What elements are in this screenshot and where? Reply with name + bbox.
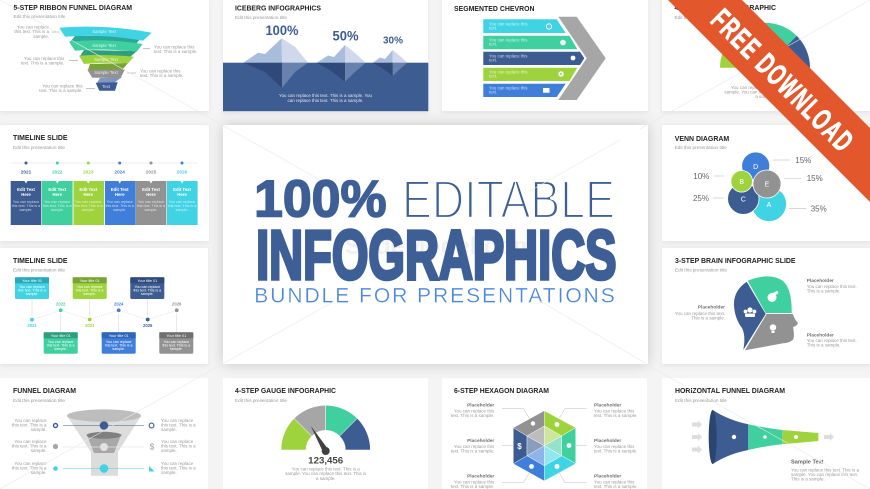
timeline cards: sample. — [83, 292, 96, 296]
funnel captions: this text. This is a — [14, 29, 49, 34]
chevron bars: text. — [489, 42, 497, 46]
subtitle: Edit this presentation title — [675, 268, 728, 272]
venn circles: B — [739, 179, 744, 186]
subtitle: Edit this presentation title — [13, 145, 66, 150]
iceberg percentages: 30% — [383, 36, 403, 46]
funnel captions: this text. This is a — [161, 466, 196, 470]
timeline boxes: this text. This is a — [12, 204, 41, 208]
chevron graphic — [558, 17, 606, 100]
iceberg caption: You can replace this text. This is a sample. You — [279, 93, 373, 98]
funnel captions: You can replace this — [140, 68, 181, 74]
iceberg percentages: 50% — [332, 28, 358, 44]
brain captions: You can replace this text. — [807, 284, 857, 289]
funnel captions: sample. — [31, 470, 46, 475]
heading: timeline 2: TIMELINE SLIDE — [13, 256, 68, 265]
gauge caption: a sample. — [316, 476, 335, 481]
chart caption: a sample. — [755, 94, 775, 99]
gauge chart — [281, 405, 370, 450]
timeline boxes: Edit Text — [173, 187, 191, 192]
funnel chart — [63, 409, 144, 476]
timeline boxes: this text. This is a — [137, 204, 166, 208]
zig-zag timeline: 2021 — [27, 323, 37, 328]
gauge caption — [285, 466, 367, 481]
funnel captions — [14, 24, 197, 93]
timeline boxes: sample. — [51, 208, 64, 212]
hexagon captions: text. This is a sample. — [594, 448, 637, 454]
chart caption: You can replace this text. This is a — [731, 85, 800, 90]
venn percentages: 15% — [807, 174, 823, 183]
iceberg percentages — [266, 23, 403, 46]
timeline cards: this text. This is a — [105, 344, 133, 348]
timeline boxes: Here — [53, 192, 63, 197]
funnel captions: You can replace — [161, 439, 194, 444]
sample text block: This is a sample. — [791, 476, 825, 482]
funnel captions: this text. This is a — [161, 422, 196, 428]
gauge caption: You can replace this text. This is a — [292, 466, 360, 472]
funnel captions: text. This is a sample. — [154, 49, 197, 54]
zig-zag timeline: 2025 — [143, 323, 153, 328]
subtitle: Edit this presentation title — [674, 15, 727, 20]
chevron bars: text. — [489, 58, 497, 62]
heading: venn: VENN DIAGRAM — [675, 134, 729, 143]
panel: hexagon diagram — [442, 378, 647, 489]
funnel captions: You can replace — [14, 418, 47, 423]
hexagon connectors — [502, 408, 587, 483]
timeline boxes: this text. This is a — [105, 204, 135, 208]
timeline cards: Your title 01 — [137, 279, 157, 283]
flow arrows — [692, 420, 834, 454]
heading: hexagon: 6-STEP HEXAGON DIAGRAM — [454, 386, 549, 395]
panel: ribbon funnel — [0, 0, 209, 111]
hexagon chart: $ — [517, 442, 522, 451]
ribbon funnel chart: Sample Text — [92, 43, 117, 48]
funnel captions: You can replace this — [24, 56, 65, 61]
brain captions: Placeholder — [807, 278, 834, 284]
panel: horizontal funnel diagram — [662, 378, 870, 489]
brain captions: You can replace this text. — [807, 338, 857, 343]
timeline cards: sample. — [112, 347, 125, 351]
hexagon captions: You can replace this — [594, 444, 635, 449]
timeline boxes: Here — [146, 192, 156, 197]
timeline boxes: this text. This is a — [168, 204, 197, 208]
chart caption: sample. You can replace this text. This is — [724, 90, 806, 94]
hexagon captions: text. This is a sample. — [451, 484, 494, 489]
iceberg caption: can replace this text. This is a sample. — [288, 98, 364, 103]
hexagon captions: text. This is a sample. — [451, 413, 494, 418]
head chart — [734, 276, 798, 350]
subtitle: Edit this presentation title — [235, 15, 288, 20]
venn percentages: 35% — [811, 204, 827, 214]
funnel captions: sample. — [31, 427, 46, 432]
venn circles: A — [767, 202, 772, 209]
heading: funnel: FUNNEL DIAGRAM — [13, 386, 76, 395]
sample text block — [791, 460, 860, 482]
subtitle: Edit this presentation title — [675, 398, 728, 403]
funnel captions: You can replace — [161, 418, 194, 423]
hexagon captions: You can replace this — [454, 444, 495, 449]
timeline cards: You can replace — [19, 285, 45, 289]
iceberg chart — [243, 38, 407, 88]
semi-circle chart — [720, 23, 810, 68]
timeline boxes: Edit Text — [111, 187, 129, 192]
watermark: SlideModel.com — [345, 233, 535, 260]
chevron bars: You can replace this — [489, 54, 528, 58]
venn percentages: 10% — [693, 172, 709, 181]
brain captions: This is a sample. — [807, 342, 840, 348]
timeline cards: You can replace — [77, 285, 103, 289]
timeline axis with years — [11, 162, 198, 174]
free download ribbon — [668, 0, 870, 202]
timeline axis with years: 2022 — [52, 170, 63, 174]
timeline cards: sample. — [54, 347, 67, 351]
heading: timeline: TIMELINE SLIDE — [13, 133, 68, 142]
funnel captions: sample. — [161, 470, 177, 475]
funnel captions: this text. This is a — [12, 444, 47, 448]
timeline cards: sample. — [170, 347, 183, 351]
ribbon funnel chart: Sample Text — [94, 70, 119, 75]
timeline boxes: sample. — [20, 208, 32, 212]
ribbon funnel chart: Sample Text — [92, 29, 117, 34]
hexagon captions: text. This is a sample. — [594, 413, 637, 418]
funnel captions: You can replace — [161, 461, 194, 466]
hexagon captions: Placeholder — [594, 474, 621, 480]
title: EDITABLE: EDITABLE — [402, 170, 615, 230]
timeline cards: this text. This is a — [76, 288, 104, 292]
heading: horizontal funnel: HORIZONTAL FUNNEL DIAGRAM — [675, 386, 785, 395]
venn percentages: 15% — [795, 156, 811, 165]
funnel captions — [12, 418, 196, 475]
funnel icons: $ — [150, 442, 155, 452]
venn percentages: 25% — [693, 194, 709, 203]
chevron bars: You can replace this — [489, 70, 528, 74]
venn circles: E — [765, 182, 770, 188]
timeline boxes: Here — [21, 192, 31, 197]
brain captions: Placeholder — [698, 304, 725, 310]
funnel captions: sample. — [31, 448, 46, 453]
timeline cards: You can replace — [48, 340, 74, 344]
timeline cards: Your title 01 — [109, 334, 129, 338]
timeline boxes: You can replace — [138, 200, 164, 204]
funnel captions: text. This is a sample. — [39, 88, 83, 93]
hexagon captions: text. This is a sample. — [451, 448, 494, 454]
timeline boxes: You can replace — [75, 200, 101, 204]
gauge caption: sample. You can replace this text. This is — [285, 471, 367, 476]
subtitle: Edit this presentation title — [675, 145, 727, 150]
chevron bars: text. — [489, 74, 497, 78]
timeline boxes: Edit Text — [79, 187, 98, 192]
gauge needle — [311, 426, 330, 455]
ribbon label: FREE DOWNLOAD — [704, 3, 860, 158]
heading: 4-step: 4-STEP DONUT INFOGRAPHIC — [674, 3, 776, 12]
timeline cards: this text. This is a — [133, 288, 161, 292]
ribbon funnel chart: Text — [102, 84, 111, 89]
brain captions — [675, 278, 857, 348]
chevron bars: text. — [489, 90, 497, 94]
brain captions: Placeholder — [807, 332, 834, 338]
timeline boxes: You can replace — [44, 200, 70, 204]
timeline cards: You can replace — [163, 340, 189, 344]
hexagon captions: You can replace this — [454, 408, 495, 414]
funnel captions: this text. This is a — [12, 422, 47, 428]
timeline cards: You can replace — [106, 340, 132, 344]
timeline boxes: Here — [177, 192, 187, 197]
timeline cards: this text. This is a — [162, 344, 190, 348]
zig-zag timeline: 2023 — [85, 323, 95, 328]
chevron bars: You can replace this — [489, 38, 528, 42]
timeline boxes: Here — [115, 192, 125, 197]
timeline boxes: this text. This is a — [74, 204, 103, 208]
timeline cards: Your title 01 — [166, 334, 186, 338]
panel: timeline slide 2 — [0, 248, 208, 364]
panel: iceberg infographics — [223, 0, 428, 112]
zig-zag timeline — [27, 299, 182, 332]
iceberg caption — [279, 93, 373, 103]
funnel captions: You can replace — [14, 461, 47, 466]
hexagon captions — [451, 402, 637, 489]
timeline axis with years: 2021 — [21, 170, 32, 174]
hexagon captions: Placeholder — [467, 438, 494, 444]
panel: main title — [223, 125, 648, 364]
funnel captions: this text. This is a — [161, 444, 196, 448]
timeline cards: this text. This is a — [18, 288, 46, 292]
hexagon captions: Placeholder — [467, 474, 494, 480]
zig-zag timeline: 2024 — [114, 302, 124, 306]
sample text block: Sample Text — [791, 460, 824, 466]
funnel captions: You can replace this — [42, 84, 83, 88]
venn circles: C — [741, 196, 746, 204]
timeline boxes: Here — [84, 192, 94, 197]
funnel captions: text. This is a sample. — [140, 73, 183, 78]
hexagon captions: Placeholder — [594, 438, 621, 444]
hexagon chart — [513, 411, 576, 481]
chart caption — [724, 85, 806, 99]
panel: segmented chevron — [442, 0, 648, 111]
subtitle: Edit this presentation title — [14, 14, 66, 19]
hexagon captions: You can replace this — [594, 408, 635, 414]
hexagon captions: You can replace this — [454, 480, 495, 484]
panel: brain infographic — [662, 248, 870, 364]
panel: venn diagram — [662, 125, 870, 241]
subtitle: Edit this presentation title — [13, 268, 66, 272]
chevron bars: text. — [489, 26, 497, 30]
hexagon captions: Placeholder — [594, 402, 621, 408]
subtitle: Edit this presentation title — [235, 398, 288, 403]
venn circles: D — [753, 164, 758, 171]
hexagon captions: You can replace this — [594, 480, 635, 484]
timeline cards — [15, 277, 193, 354]
brain captions: This is a sample. — [691, 316, 725, 320]
timeline axis with years: 2023 — [83, 170, 94, 174]
subtitle: Edit this presentation title — [13, 398, 66, 403]
timeline cards: Your title 01 — [80, 279, 100, 283]
sample text block: sample. You can replace this text. — [791, 472, 858, 477]
water block — [223, 63, 428, 111]
zig-zag timeline: 2026 — [172, 302, 182, 306]
timeline boxes: this text. This is a — [43, 204, 72, 208]
brain captions: This is a sample. — [807, 288, 840, 294]
hexagon captions: text. This is a sample. — [594, 484, 637, 489]
venn circles — [728, 152, 786, 222]
heading: ribbon funnel: 5-STEP RIBBON FUNNEL DIAGRAM — [14, 3, 132, 12]
funnel captions: text. This is a sample. — [21, 60, 64, 66]
timeline boxes — [11, 181, 198, 225]
funnel captions: You can replace — [17, 24, 49, 30]
heading: gauge: 4-STEP GAUGE INFOGRAPHIC — [235, 386, 336, 395]
ribbon funnel chart — [59, 27, 152, 91]
chevron bars: You can replace this — [489, 22, 528, 26]
gauge value: 123,456 — [308, 456, 343, 466]
chevron bars — [483, 19, 584, 97]
funnel captions: this text. This is a — [12, 466, 47, 470]
funnel icons — [53, 423, 155, 472]
timeline boxes: You can replace — [13, 200, 39, 204]
heading: brain: 3-STEP BRAIN INFOGRAPHIC SLIDE — [675, 256, 796, 265]
ribbon funnel chart: Sample Text — [94, 57, 119, 62]
panel: funnel diagram — [0, 378, 208, 489]
timeline axis with years: 2025 — [146, 170, 157, 174]
chevron bars: You can replace this — [489, 86, 528, 90]
timeline cards: sample. — [26, 292, 38, 296]
timeline cards: Your title 01 — [22, 279, 42, 283]
panel: 4-step infographic under ribbon — [662, 0, 870, 111]
chevron icons — [543, 24, 575, 93]
funnel captions: sample. — [33, 34, 49, 39]
timeline boxes: sample. — [113, 208, 126, 212]
timeline boxes: sample. — [82, 208, 95, 212]
timeline boxes: Edit Text — [142, 187, 160, 192]
panel: timeline slide 1 — [0, 125, 209, 241]
timeline axis with years: 2024 — [114, 170, 125, 174]
timeline boxes: Edit Text — [48, 187, 67, 192]
funnel captions: You can replace this — [154, 44, 195, 50]
zig-zag timeline: 2022 — [56, 302, 66, 306]
timeline boxes: sample. — [145, 208, 157, 212]
timeline boxes: You can replace — [107, 200, 133, 204]
subtitle: bundle for presentations: BUNDLE FOR PRESENTATIONS — [254, 285, 615, 308]
horizontal funnel chart — [709, 410, 818, 464]
heading: chevron: SEGMENTED CHEVRON — [454, 4, 534, 13]
timeline boxes: You can replace — [169, 200, 195, 204]
title: 100%: 100% — [254, 171, 386, 229]
timeline boxes: Edit Text — [17, 187, 35, 192]
funnel captions: You can replace — [14, 439, 47, 444]
brain captions: You can replace this text. — [675, 311, 725, 316]
timeline cards: this text. This is a — [47, 344, 75, 348]
venn percentages — [693, 156, 827, 214]
timeline cards: You can replace — [134, 285, 160, 289]
hexagon captions: Placeholder — [467, 402, 494, 408]
heading: iceberg: ICEBERG INFOGRAPHICS — [235, 4, 321, 12]
center panel shadow — [223, 125, 648, 364]
timeline cards: Your title 01 — [51, 334, 71, 338]
panel: gauge infographic — [223, 378, 428, 489]
sample text block: You can replace this text. This is a — [791, 468, 860, 472]
funnel captions: sample. — [161, 427, 177, 432]
title: INFOGRAPHICS: INFOGRAPHICS — [256, 216, 616, 294]
iceberg percentages: 100% — [266, 23, 298, 38]
timeline axis with years: 2026 — [177, 170, 188, 174]
funnel captions: sample. — [161, 448, 177, 453]
timeline boxes: sample. — [176, 208, 188, 212]
timeline cards: sample. — [141, 292, 154, 296]
